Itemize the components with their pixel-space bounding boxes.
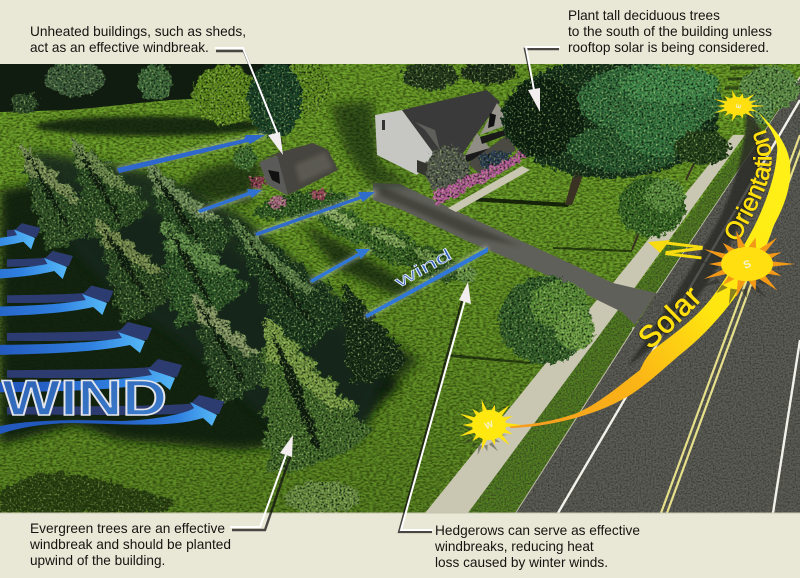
label: Orientation: Orientation [724,130,772,240]
callout: evergreen trees [29,435,293,568]
callout: unheated buildings: act as an effective windbreak. [30,40,209,55]
flower shrubs around shed [233,146,349,225]
arrow fronts [0,229,217,434]
callout text: deciduous trees: Plant tall deciduous trees [568,8,720,23]
scene label: wind: wind [390,245,455,292]
conifer row back [18,136,234,256]
foundation shrub [426,146,513,194]
road [515,77,800,513]
ground shadows [0,100,632,513]
north arrow: N [653,239,715,262]
sun: east [713,90,765,122]
callout: evergreen trees: upwind of the building. [30,553,165,568]
conifer windbreak [18,136,408,474]
lawn [0,64,800,513]
solar arc shadow [628,106,765,366]
sidewalk [425,135,745,513]
callout text: evergreen trees: Evergreen trees are an effective [30,521,225,536]
grass verge [468,100,785,513]
label: Solar: Solar [638,287,700,348]
solar arc [510,112,790,428]
streetside trees [284,96,774,514]
north arrow [648,240,703,260]
callout: unheated buildings [30,24,283,155]
conifer row middle [94,214,408,386]
flower beds [432,150,526,206]
house [375,90,522,177]
callout: evergreen trees: windbreak and should be planted [29,537,231,552]
background trees [11,60,800,138]
sun: west [458,399,522,456]
conifer mass backing [30,150,385,450]
driveway [373,183,656,325]
callout text: hedgerows: Hedgerows can serve as effective [435,523,640,538]
bottom band [0,513,800,578]
sun: south: S [742,258,753,272]
front walk [448,166,530,212]
callout: hedgerows: windbreaks, reducing heat [434,539,594,554]
callout: hedgerows [399,282,640,570]
big deciduous tree [502,58,722,205]
wind streams through the property [117,135,488,318]
callout: hedgerows: loss caused by winter winds. [435,555,608,570]
WIND lettering: WIND [2,370,167,426]
tree line in the distance [0,64,320,112]
callout: deciduous trees: to the south of the building unless [568,24,772,39]
conifer row front [188,293,374,474]
sun: west: W [483,419,495,431]
landscape scene [0,64,800,512]
callout: deciduous trees [525,8,772,112]
upper-right distant grass stripes [725,68,770,88]
shed [259,143,338,196]
callout text: unheated buildings: Unheated buildings, such as sheds, [30,24,246,39]
big wind arrows [0,223,224,434]
arrow backs [0,223,224,415]
sun: east: E [735,103,744,110]
callout: deciduous trees: rooftop solar is being considered. [568,40,769,55]
hedgerow [318,206,478,286]
sun: south [697,230,795,305]
